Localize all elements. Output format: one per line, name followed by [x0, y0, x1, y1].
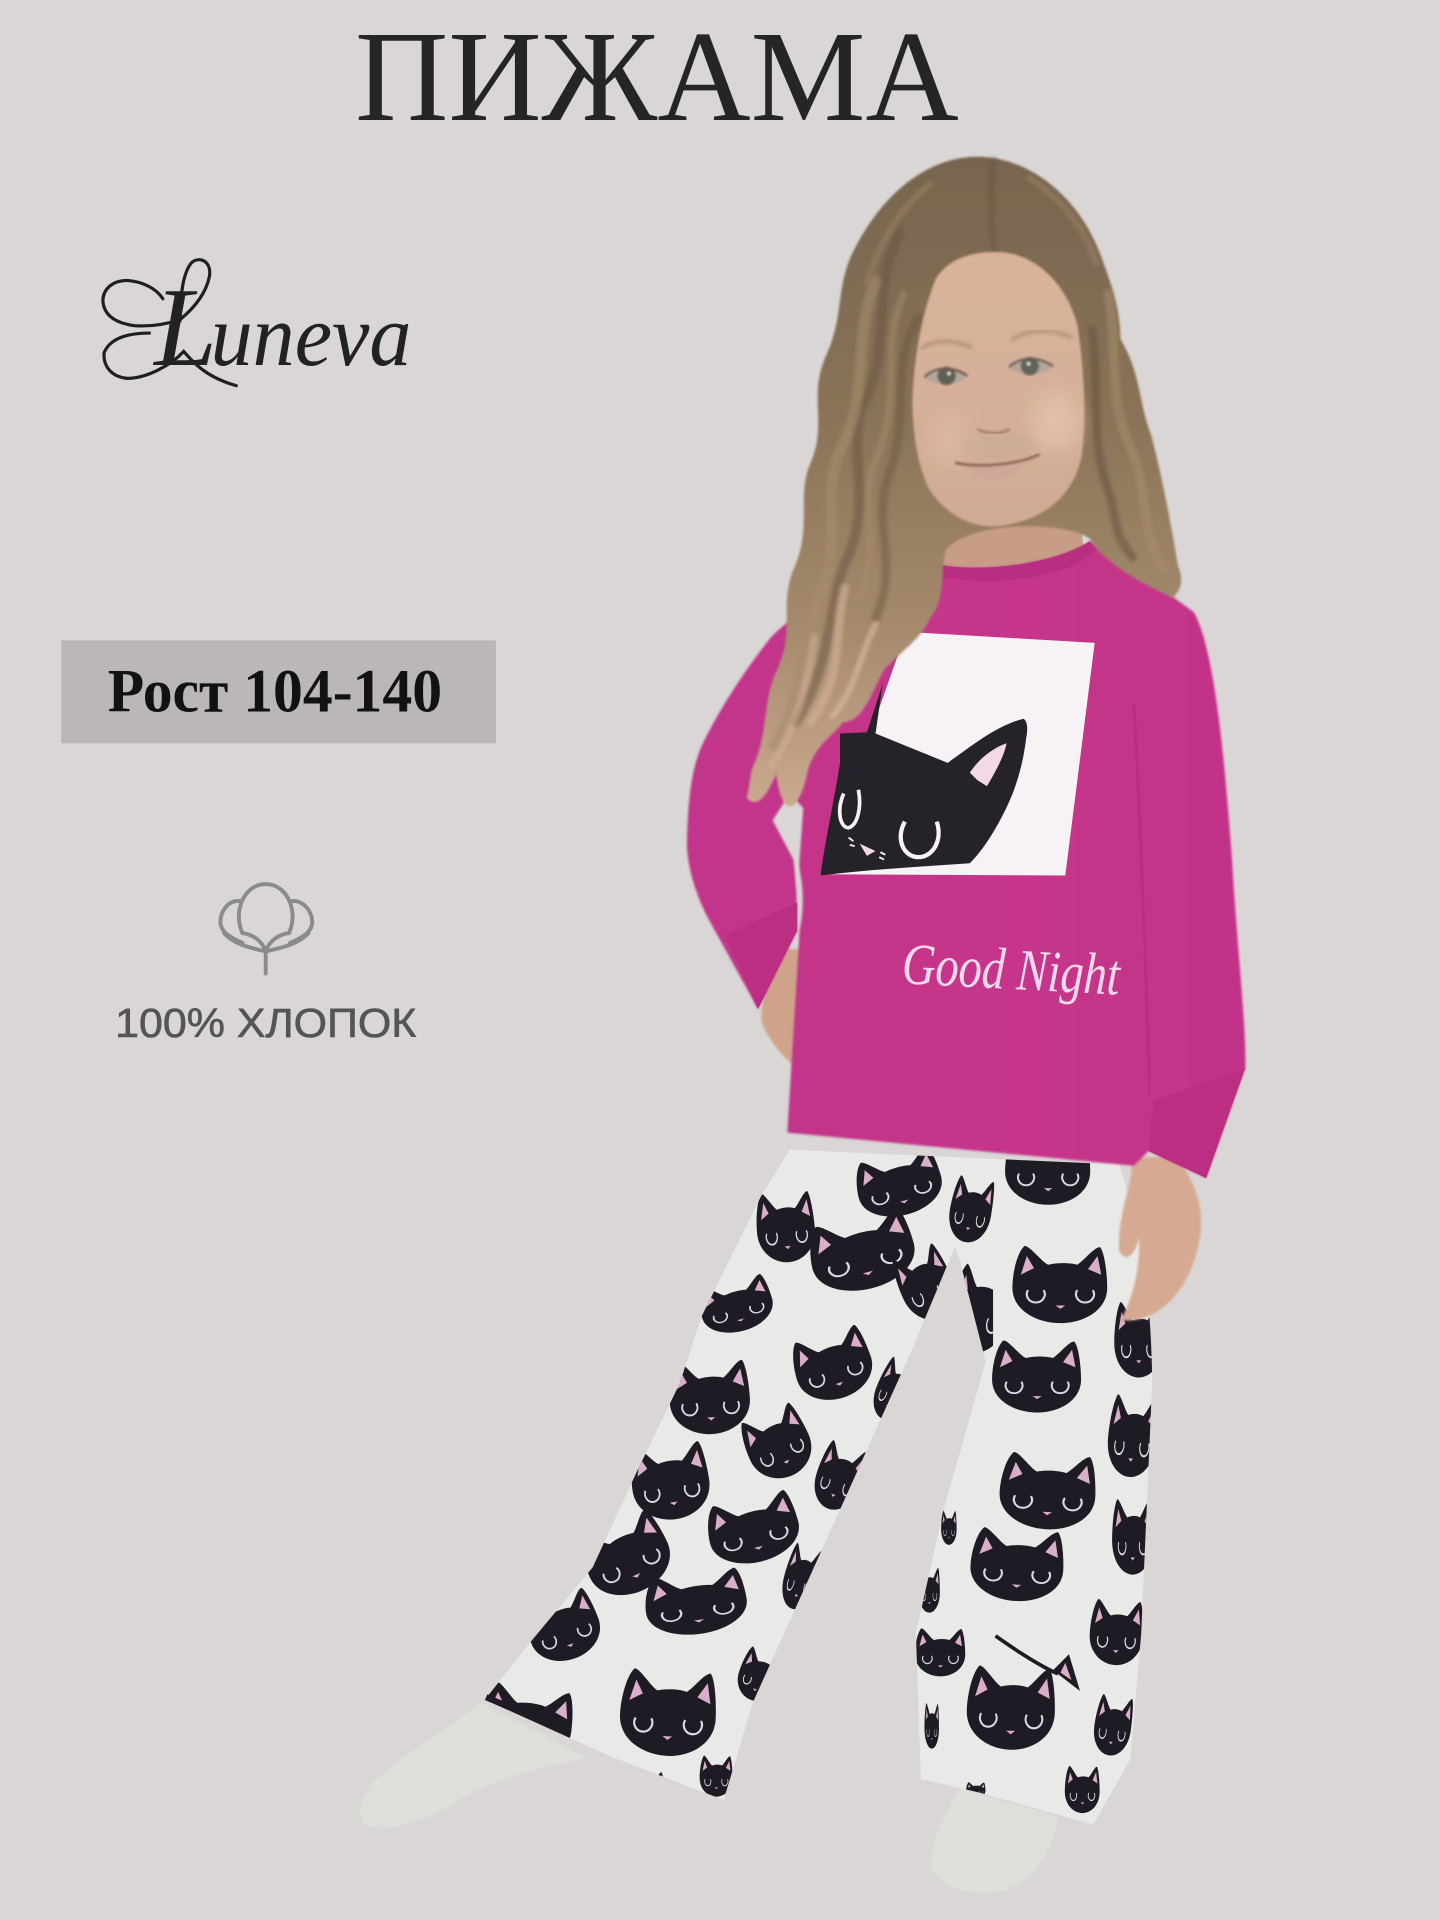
nose — [977, 429, 1010, 433]
right sock — [931, 1788, 1058, 1893]
eyebrows — [921, 331, 1073, 349]
height badge — [61, 640, 496, 743]
mouth — [955, 454, 1040, 479]
left hand — [761, 949, 818, 1073]
cotton label: 100% ХЛОПОК — [115, 1000, 417, 1046]
pants — [476, 1132, 1163, 1824]
pants cat pattern — [476, 1132, 1163, 1813]
left sock — [361, 1702, 588, 1827]
hair strands — [771, 159, 1163, 765]
height badge: Рост 104-140 — [108, 657, 442, 725]
left eye — [924, 367, 967, 385]
child figure wearing pyjama — [361, 157, 1245, 1893]
title: ПИЖАМА — [355, 5, 959, 149]
right hand — [1119, 1157, 1201, 1321]
face — [912, 252, 1084, 527]
cheek glow — [1031, 393, 1080, 452]
pants hem — [486, 1697, 563, 1730]
right cuff — [1149, 1068, 1245, 1178]
brand logo: Luneva — [103, 260, 411, 390]
right eye — [1009, 357, 1053, 375]
brand logo: Luneva: L — [152, 266, 217, 390]
gap between arm and body — [773, 793, 803, 894]
brand logo: Luneva: uneva — [211, 287, 411, 385]
chest print black cat — [820, 683, 1027, 876]
hair — [747, 157, 1181, 806]
left cuff — [725, 902, 797, 1009]
chest print white panel — [820, 632, 1095, 876]
neckband — [918, 541, 1096, 581]
neck — [943, 490, 1087, 588]
shirt — [687, 541, 1245, 1178]
text: Good Night: Good Night — [901, 931, 1123, 1008]
icon: cotton flower — [220, 884, 312, 973]
